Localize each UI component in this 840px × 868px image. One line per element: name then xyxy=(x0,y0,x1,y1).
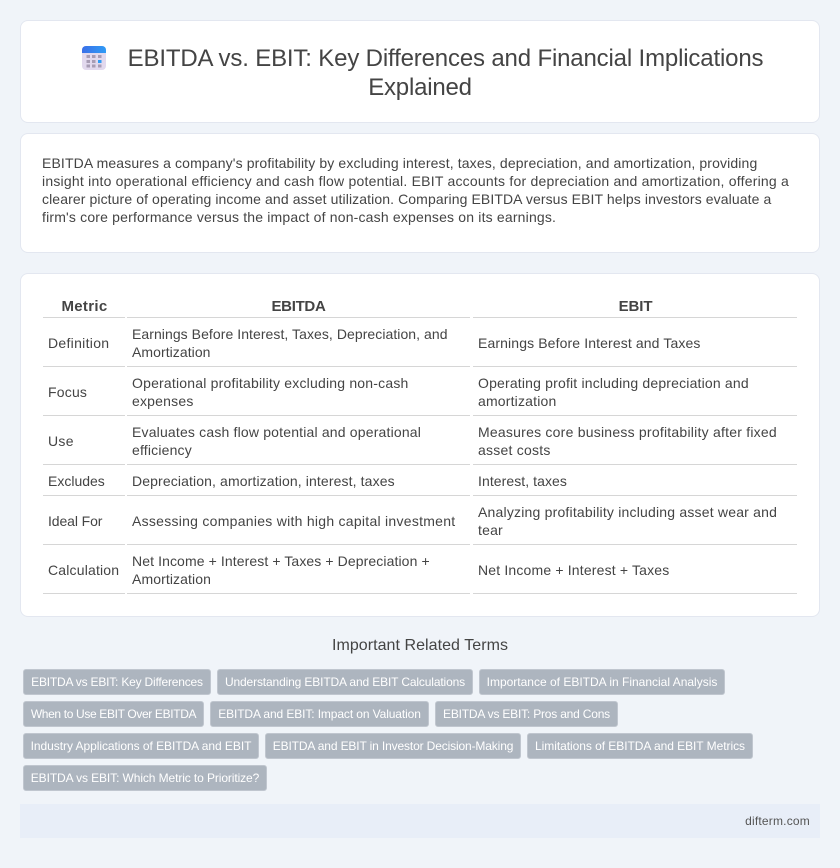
row: excludes: Interest, taxes xyxy=(478,473,567,489)
related term tags: Importance of EBITDA in Financial Analysis xyxy=(487,675,717,689)
row: calculation: Net Income + Interest + Taxes xyxy=(478,562,669,578)
related term tags: EBITDA and EBIT in Investor Decision-Making xyxy=(273,739,513,753)
row: excludes xyxy=(48,473,567,489)
related term tags: Understanding EBITDA and EBIT Calculations xyxy=(225,675,465,689)
title: Explained xyxy=(368,74,472,101)
related term tags: Limitations of EBITDA and EBIT Metrics xyxy=(535,739,745,753)
row: ideal for: tear xyxy=(478,522,503,538)
related term tags: EBITDA vs EBIT: Which Metric to Prioritize? xyxy=(31,771,259,785)
row: use: Measures core business profitability after fixed xyxy=(478,424,777,440)
row: focus: Operating profit including depreciation and xyxy=(478,375,749,391)
row: excludes: Depreciation, amortization, interest, taxes xyxy=(132,473,395,489)
row: excludes: Excludes xyxy=(48,473,105,489)
row: use: Evaluates cash flow potential and operational xyxy=(132,424,421,440)
row: definition: Amortization xyxy=(132,344,211,360)
row: definition: Earnings Before Interest, Taxes, Depreciation, and xyxy=(132,326,448,342)
intro text: insight into operational efficiency and cash flow potential. EBIT accounts for depreciation and amortization, offering a xyxy=(42,173,789,189)
table panel xyxy=(20,273,820,617)
row: ideal for: Ideal For xyxy=(48,513,102,529)
row: calculation: Calculation xyxy=(48,562,119,578)
row: definition xyxy=(48,326,701,360)
related term tags: Industry Applications of EBITDA and EBIT xyxy=(31,739,251,753)
row: use: asset costs xyxy=(478,442,551,458)
related term tags: EBITDA vs EBIT: Pros and Cons xyxy=(443,707,610,721)
row: definition: Earnings Before Interest and Taxes xyxy=(478,335,701,351)
related term tags xyxy=(23,669,753,791)
title xyxy=(128,45,763,101)
row: use: efficiency xyxy=(132,442,192,458)
title: EBITDA vs. EBIT: Key Differences and Financial Implications xyxy=(128,45,763,72)
related term tags: EBITDA vs EBIT: Key Differences xyxy=(31,675,203,689)
table header row xyxy=(62,298,652,315)
related term tags: When to Use EBIT Over EBITDA xyxy=(31,707,196,721)
intro text: firm's core performance versus the impact of non-cash expenses on its earnings. xyxy=(42,209,556,225)
row: use xyxy=(48,424,777,458)
intro panel xyxy=(20,133,820,253)
related terms heading: Important Related Terms xyxy=(332,637,508,654)
intro text: EBITDA measures a company's profitability by excluding interest, taxes, depreciation, and amortization, providing xyxy=(42,155,757,171)
table header row: EBIT xyxy=(619,298,652,315)
header card xyxy=(20,20,820,123)
row: ideal for xyxy=(48,504,777,538)
row: calculation: Amortization xyxy=(132,571,211,587)
icon: calendar xyxy=(82,46,106,70)
row: calculation: Net Income + Interest + Taxes + Depreciation + xyxy=(132,553,430,569)
intro text: clearer picture of operating income and asset utilization. Comparing EBITDA versus EBIT helps investors evaluate a xyxy=(42,191,771,207)
row: focus xyxy=(48,375,749,409)
row: focus: amortization xyxy=(478,393,556,409)
row: use: Use xyxy=(48,433,74,449)
row: ideal for: Assessing companies with high capital investment xyxy=(132,513,455,529)
related term tags: EBITDA and EBIT: Impact on Valuation xyxy=(218,707,421,721)
table header row: Metric xyxy=(62,298,107,315)
row: calculation xyxy=(48,553,669,587)
comparison table xyxy=(43,298,797,594)
row: focus: expenses xyxy=(132,393,194,409)
footer xyxy=(20,804,820,838)
row: focus: Focus xyxy=(48,384,87,400)
row: ideal for: Analyzing profitability including asset wear and xyxy=(478,504,777,520)
row: focus: Operational profitability excluding non-cash xyxy=(132,375,409,391)
row: definition: Definition xyxy=(48,335,109,351)
table header row: EBITDA xyxy=(271,298,326,315)
footer source: difterm.com xyxy=(745,814,810,828)
intro text xyxy=(42,155,789,225)
